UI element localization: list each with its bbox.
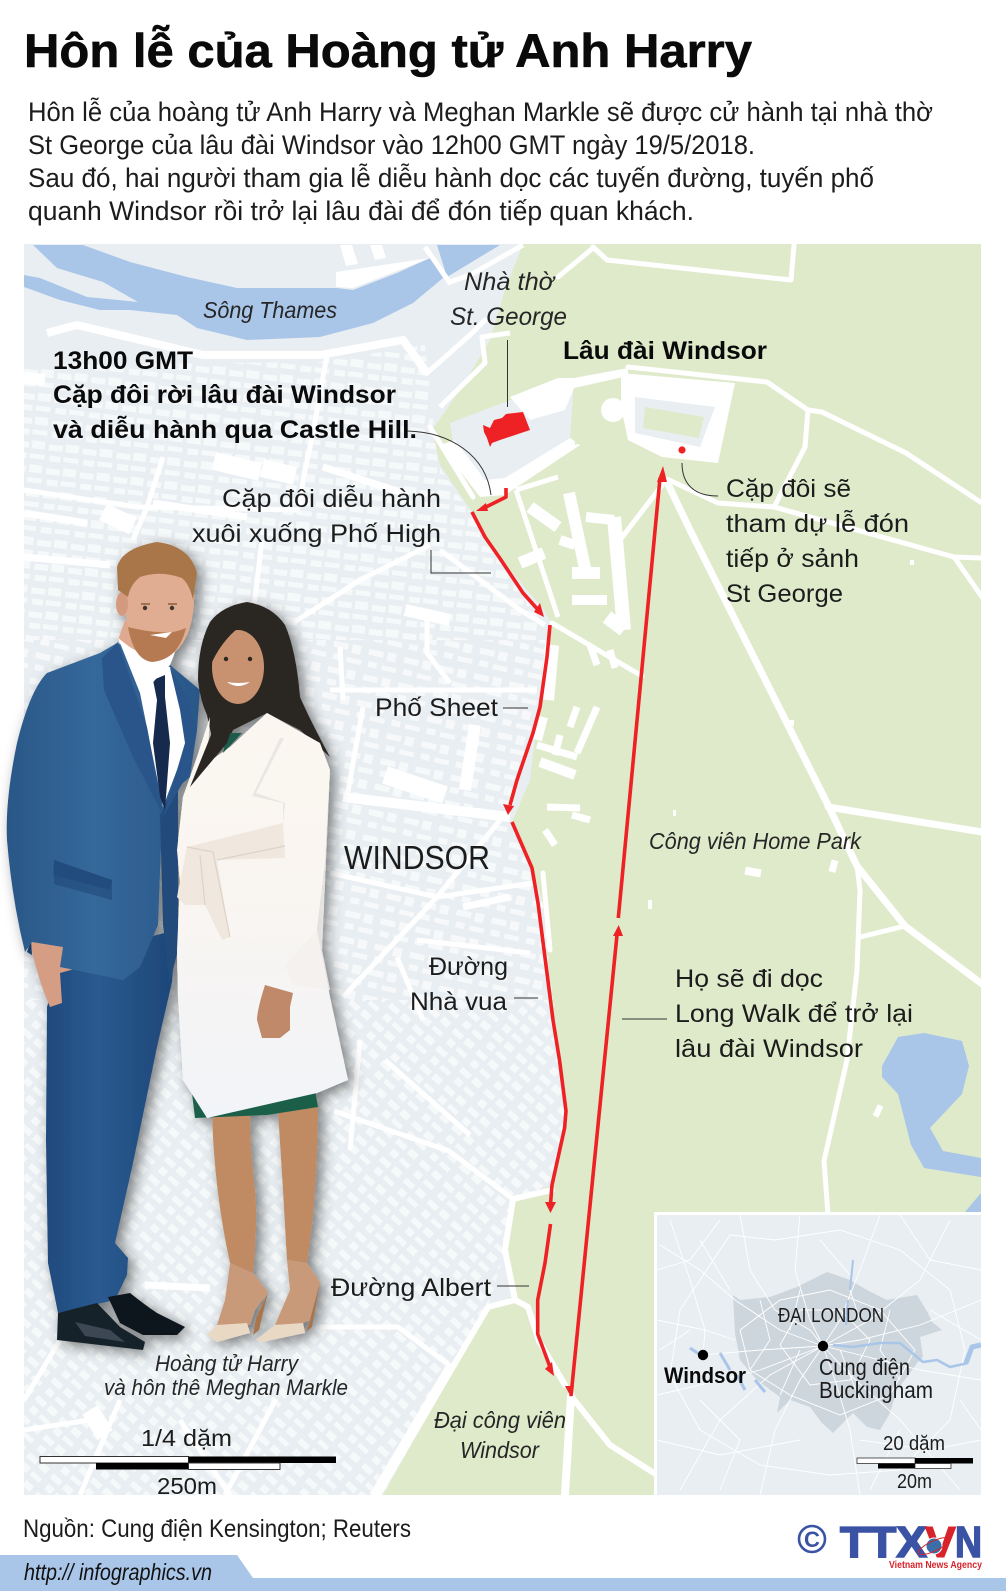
logo: TTXVN [799, 1518, 982, 1571]
intro text block [28, 96, 933, 226]
label: Windsor castle: Lâu đài Windsor [563, 337, 767, 365]
small park buildings [648, 560, 914, 1118]
inset: Buckingham Palace marker [818, 1341, 933, 1403]
label: Windsor Great Park [434, 1411, 565, 1458]
label: Home Park: Công viên Home Park [649, 828, 862, 854]
label: Kings Road [412, 956, 507, 1010]
map labels [53, 268, 913, 1463]
label: Sheet Street: Phố Sheet [375, 694, 498, 722]
callout: departure at 13h00: và diễu hành qua Castle Hill. [53, 414, 417, 444]
footer url: http:// infographics.vn [24, 1559, 212, 1585]
callout: Long Walk [676, 969, 912, 1057]
lake in Home Park [882, 1033, 981, 1212]
inset: Buckingham Palace marker: Buckingham [819, 1377, 933, 1403]
intro text block: St George của lâu đài Windsor vào 12h00 GMT ngày 19/5/2018. [28, 130, 755, 160]
intro text block: quanh Windsor rồi trở lại lâu đài để đón tiếp quan khách. [28, 196, 694, 226]
photo: Prince Harry and Meghan Markle [7, 542, 348, 1350]
callout: departure at 13h00 [53, 347, 417, 444]
label: Thames river: Sông Thames [203, 297, 337, 323]
leader lines [407, 340, 718, 1286]
label: Kings Road: Đường [429, 953, 508, 981]
photo caption: và hôn thê Meghan Markle [104, 1375, 348, 1400]
footer bar [0, 1555, 1006, 1591]
inset: Windsor marker: Windsor [664, 1363, 746, 1388]
parade route [472, 478, 660, 1396]
label: Windsor Great Park: Windsor [460, 1437, 540, 1463]
river Thames [24, 245, 500, 340]
figure: Meghan [177, 602, 348, 1342]
Thames in inset [690, 1260, 981, 1392]
town building texture [24, 345, 566, 1495]
scale bar: main map: 1/4 dặm [141, 1425, 232, 1451]
label: Windsor Great Park: Đại công viên [434, 1407, 566, 1433]
logo: TTXVN: C [804, 1527, 820, 1552]
label: St George chapel [450, 268, 567, 331]
panel: route map of Windsor [24, 244, 984, 1499]
inset scale bar [856, 1434, 973, 1488]
inset: Windsor marker [664, 1350, 746, 1383]
intro text block: Hôn lễ của hoàng tử Anh Harry và Meghan Markle sẽ được cử hành tại nhà thờ [28, 96, 933, 127]
park roads [378, 245, 982, 1495]
scale bar: main map: 250m [157, 1473, 217, 1499]
callout: reception at St George hall: tham dự lễ đón [726, 509, 909, 538]
Windsor castle [440, 368, 735, 497]
town streets and buildings [24, 245, 624, 1495]
inset scale bar: 20m [897, 1471, 932, 1493]
inset: Buckingham Palace marker: Cung điện [819, 1354, 910, 1380]
callout: High Street: xuôi xuống Phố High [192, 520, 441, 548]
riverside buildings [336, 245, 430, 288]
park areas [383, 244, 981, 1495]
callout: reception at St George hall: tiếp ở sảnh [726, 545, 859, 573]
intro text block: Sau đó, hai người tham gia lễ diễu hành dọc các tuyến đường, tuyến phố [28, 162, 874, 193]
callout: reception at St George hall: St George [726, 580, 843, 608]
label: Windsor town: WINDSOR [344, 839, 490, 876]
photo caption [104, 1351, 348, 1400]
callout: High Street [192, 484, 441, 548]
logo: TTXVN: V [925, 1518, 957, 1567]
figure: Harry [7, 542, 200, 1350]
Greater London area [733, 1272, 942, 1433]
callout: Long Walk: lâu đài Windsor [675, 1035, 863, 1063]
callout: Long Walk: Long Walk để trở lại [675, 1000, 913, 1028]
photo caption: Hoàng tử Harry [155, 1351, 300, 1376]
inset road network [657, 1215, 981, 1495]
callout: departure at 13h00: 13h00 GMT [53, 347, 193, 375]
label: Albert Road: Đường Albert [331, 1274, 491, 1302]
callout: departure at 13h00: Cặp đôi rời lâu đài Windsor [53, 381, 396, 409]
callout: reception at St George hall: Cặp đôi sẽ [726, 475, 851, 503]
source note: Nguồn: Cung điện Kensington; Reuters [23, 1515, 411, 1543]
route arrowheads [476, 466, 667, 1397]
logo: TTXVN: TTX [840, 1518, 927, 1567]
logo: TTXVN: Vietnam News Agency [889, 1560, 982, 1571]
inset scale bar: 20 dặm [883, 1433, 945, 1455]
title: Hôn lễ của Hoàng tử Anh Harry [24, 24, 752, 77]
red dot: St George hall [678, 446, 686, 454]
label: Kings Road: Nhà vua [410, 988, 507, 1016]
logo: TTXVN: N [955, 1518, 982, 1567]
St George's chapel [483, 412, 530, 447]
scale bar: main map [40, 1428, 336, 1494]
panel: inset map of Greater London [654, 1212, 984, 1497]
label: St George chapel: Nhà thờ [464, 268, 556, 296]
callout: reception at St George hall [726, 475, 909, 608]
callout: High Street: Cặp đôi diễu hành [222, 484, 441, 513]
callout: Long Walk: Họ sẽ đi dọc [675, 965, 823, 993]
inset: Greater London label: ĐẠI LONDON [778, 1305, 884, 1327]
label: St George chapel: St. George [450, 303, 567, 331]
